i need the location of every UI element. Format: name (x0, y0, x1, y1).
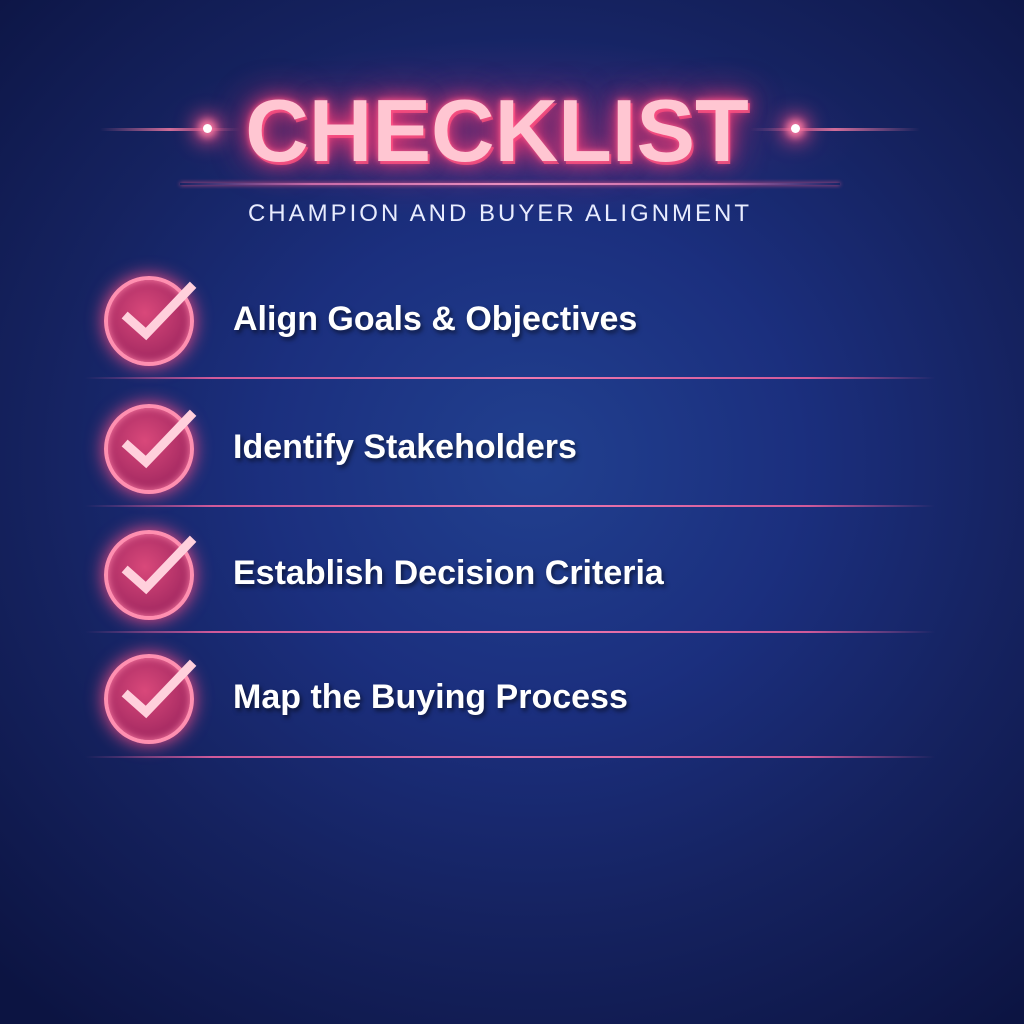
title: CHECKLIST (245, 81, 749, 180)
icon: check circle (104, 530, 194, 620)
icon: check circle (104, 654, 194, 744)
item 3 (90, 516, 668, 634)
text: item 2: Identify Stakeholders (233, 428, 577, 466)
title flare right (750, 128, 920, 131)
icon: check circle (104, 276, 194, 366)
flare dot right (791, 124, 800, 133)
item 2 (90, 390, 580, 508)
title flare left (100, 128, 240, 131)
title glow (150, 40, 870, 220)
text: item 3: Establish Decision Criteria (233, 554, 664, 592)
text: item 4: Map the Buying Process (233, 678, 628, 716)
text: item 1: Align Goals & Objectives (233, 300, 637, 338)
title underline (180, 183, 840, 185)
item 4 (90, 640, 630, 758)
subtitle: CHAMPION AND BUYER ALIGNMENT (248, 200, 752, 227)
flare dot left (203, 124, 212, 133)
icon: check circle (104, 404, 194, 494)
item 1 (90, 262, 640, 380)
